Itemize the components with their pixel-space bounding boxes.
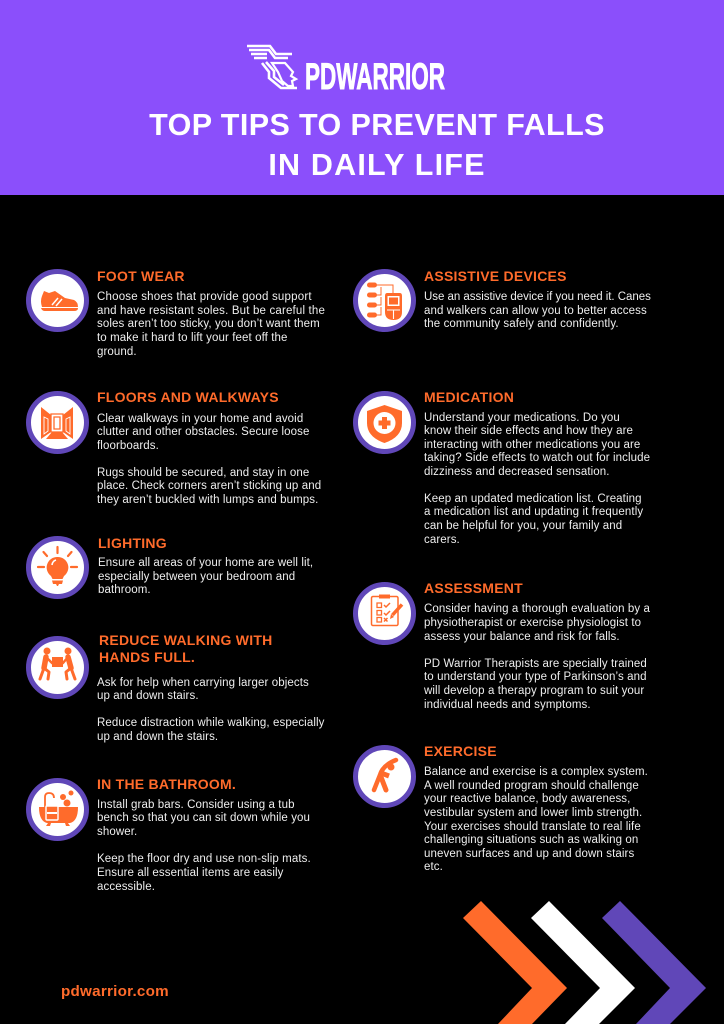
panel: assistive devices xyxy=(424,268,651,330)
text: etc. xyxy=(424,861,443,873)
text: Use an assistive device if you need it. Canes xyxy=(424,291,651,303)
text: carers. xyxy=(424,534,460,546)
text: Your exercises should translate to real life xyxy=(424,821,641,833)
panel: exercise xyxy=(424,743,648,873)
panel: assessment xyxy=(424,580,650,711)
panel: foot wear xyxy=(97,268,325,358)
text: accessible. xyxy=(97,881,155,893)
panel: medication xyxy=(424,389,650,546)
text: physiotherapist or exercise physiologist to xyxy=(424,617,641,629)
text: especially between your bedroom and xyxy=(98,571,295,583)
icon: reduce walking with hands full xyxy=(26,636,89,699)
header band xyxy=(0,0,724,195)
text: shower. xyxy=(97,826,137,838)
panel: reduce walking with hands full: REDUCE WALKING WITH xyxy=(99,632,273,648)
icon: medication xyxy=(353,391,416,454)
text: and walkers can allow you to better access xyxy=(424,305,647,317)
text: the community safely and confidently. xyxy=(424,318,619,330)
text: to understand your type of Parkinson’s and xyxy=(424,671,647,683)
text: assess your balance and risk for falls. xyxy=(424,631,620,643)
panel: floors and walkways: FLOORS AND WALKWAYS xyxy=(97,389,279,405)
text: Reduce distraction while walking, especially xyxy=(97,717,324,729)
text: Ensure all areas of your home are well lit, xyxy=(98,557,313,569)
text: taking? Side effects to watch out for include xyxy=(424,452,650,464)
text: Ask for help when carrying larger objects xyxy=(97,677,309,689)
text: clutter and other obstacles. Secure loose xyxy=(97,426,310,438)
text: Balance and exercise is a complex system. xyxy=(424,766,648,778)
icon: foot wear xyxy=(26,269,89,332)
title: TOP TIPS TO PREVENT FALLS xyxy=(149,108,605,142)
text: your reactive balance, body awareness, xyxy=(424,793,630,805)
logo: PDWARRIOR xyxy=(305,56,445,97)
text: vestibular system and lower limb strength. xyxy=(424,807,642,819)
icon: exercise xyxy=(353,745,416,808)
text: Rugs should be secured, and stay in one xyxy=(97,467,309,479)
text: to make it hard to lift your feet off the xyxy=(97,332,288,344)
text: ground. xyxy=(97,346,137,358)
text: soles aren’t too sticky, you don’t want them xyxy=(97,318,320,330)
panel: in the bathroom: IN THE BATHROOM. xyxy=(97,776,236,792)
logo xyxy=(247,44,445,97)
text: place. Check corners aren’t sticking up and xyxy=(97,480,321,492)
text: Install grab bars. Consider using a tub xyxy=(97,799,295,811)
text: floorboards. xyxy=(97,440,159,452)
panel: assessment: ASSESSMENT xyxy=(424,580,523,596)
panel: foot wear: FOOT WEAR xyxy=(97,268,185,284)
text: up and down stairs. xyxy=(97,690,199,702)
text: Choose shoes that provide good support xyxy=(97,291,312,303)
text: PD Warrior Therapists are specially trained xyxy=(424,658,647,670)
text: will develop a therapy program to suit your xyxy=(424,685,644,697)
text: Ensure all essential items are easily xyxy=(97,867,284,879)
text: they aren’t buckled with lumps and bumps. xyxy=(97,494,318,506)
text: uneven surfaces and up and down stairs xyxy=(424,848,634,860)
text: up and down the stairs. xyxy=(97,731,218,743)
text: HANDS FULL. xyxy=(99,649,195,665)
text: Clear walkways in your home and avoid xyxy=(97,413,303,425)
text: challenging situations such as walking on xyxy=(424,834,638,846)
icon: assessment xyxy=(353,582,416,645)
text: Keep the floor dry and use non-slip mats. xyxy=(97,853,311,865)
text: Understand your medications. Do you xyxy=(424,412,620,424)
icon: floors and walkways xyxy=(26,391,89,454)
panel: exercise: EXERCISE xyxy=(424,743,497,759)
title: IN DAILY LIFE xyxy=(268,148,486,182)
text: dizziness and decreased sensation. xyxy=(424,466,610,478)
icon: assistive devices xyxy=(353,269,416,332)
panel: assistive devices: ASSISTIVE DEVICES xyxy=(424,268,567,284)
panel: lighting xyxy=(98,535,313,596)
panel: medication: MEDICATION xyxy=(424,389,514,405)
text: and have resistant soles. But be careful the xyxy=(97,305,325,317)
website link: pdwarrior.com xyxy=(61,983,169,1000)
icon: bathroom xyxy=(26,778,89,841)
text: individual needs and symptoms. xyxy=(424,699,591,711)
text: bathroom. xyxy=(98,584,151,596)
icon: lighting xyxy=(26,536,89,599)
panel: reduce walking with hands full xyxy=(97,632,324,743)
text: Consider having a thorough evaluation by a xyxy=(424,603,650,615)
panel: in the bathroom xyxy=(97,776,311,893)
text: bench so that you can sit down while you xyxy=(97,812,310,824)
text: can be helpful for you, your family and xyxy=(424,520,622,532)
text: a medication list and updating it frequently xyxy=(424,506,643,518)
text: A well rounded program should challenge xyxy=(424,780,639,792)
title xyxy=(149,108,605,182)
text: Keep an updated medication list. Creating xyxy=(424,493,642,505)
panel: floors and walkways xyxy=(97,389,321,506)
panel: lighting: LIGHTING xyxy=(98,535,167,551)
text: know their side effects and how they are xyxy=(424,425,633,437)
text: interacting with other medications you are xyxy=(424,439,640,451)
